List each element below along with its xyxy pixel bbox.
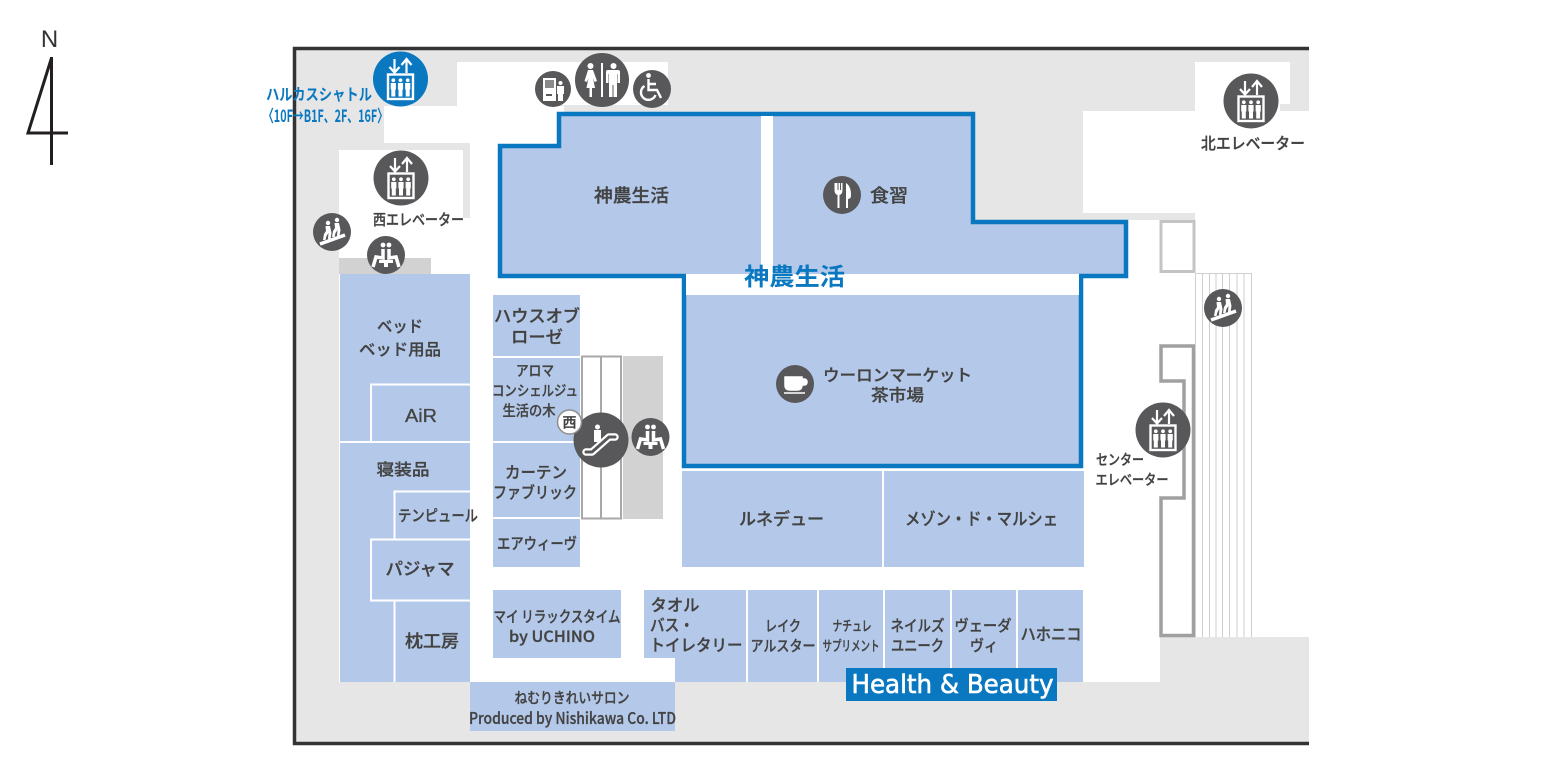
icon: vending machine <box>535 71 571 107</box>
label: 北エレベーター: 北エレベーター <box>1201 130 1305 154</box>
panel: health and beauty shops: タオル <box>650 592 700 616</box>
panel: マイリラックスタイム <box>493 590 621 658</box>
stairs lines <box>1195 273 1252 637</box>
floor plan background <box>294 48 1309 744</box>
panel: lower shops: ルネデュー <box>739 505 824 530</box>
icon: escalator <box>574 412 628 468</box>
panel: left column shops: パジャマ <box>386 555 454 580</box>
panel: middle column shops: カーテン <box>505 459 567 483</box>
panel: middle column shops: 生活の木 <box>502 400 556 421</box>
panel: health and beauty shops: ナチュレ <box>832 616 872 636</box>
panel: health and beauty shops: バス・ <box>650 612 694 636</box>
label: ハルカスシャトル: 〈10F→B1F、2F、16F〉 <box>263 102 388 127</box>
panel: health and beauty shops: ヴェーダ <box>954 614 1012 636</box>
panel: health and beauty shops: ユニーク <box>891 634 944 656</box>
panel: left column shops: ベッド <box>377 313 423 337</box>
panel: ねむりきれいサロン: ねむりきれいサロン <box>514 687 630 708</box>
label: 西エレベーター: 西エレベーター <box>373 208 464 230</box>
label: Health & Beauty: Health & Beauty <box>852 670 1054 700</box>
panel: middle column shops: コンシェルジュ <box>492 380 578 401</box>
icon: Halkas shuttle elevator <box>373 52 428 106</box>
icon: west elevator <box>374 150 428 206</box>
panel: left column shops: ベッド用品 <box>359 336 441 360</box>
label: センターエレベーター: センター <box>1096 449 1144 470</box>
icon: center elevator <box>1136 402 1190 458</box>
panel: left column shops: 寝装品 <box>376 456 430 480</box>
panel: middle column shops: ハウスオブ <box>494 302 580 327</box>
label: センターエレベーター: エレベーター <box>1096 469 1168 490</box>
north void outline <box>1161 222 1194 272</box>
panel: middle column shops: ローゼ <box>511 323 563 348</box>
north arrow: N <box>41 26 58 53</box>
panel: middle column shops: アロマ <box>516 360 554 381</box>
icon: west badge 西 <box>558 410 582 434</box>
center elevator shaft outline <box>1161 346 1194 636</box>
panel: left column shops: テンピュール <box>398 504 478 526</box>
escalator well <box>582 356 663 519</box>
panel: health and beauty shops: アルスター <box>750 635 816 656</box>
panel: health and beauty shops: ハホニコ <box>1020 621 1082 645</box>
panel: マイリラックスタイム: by UCHINO <box>509 625 595 647</box>
panel: left column shops: 枕工房 <box>405 627 459 652</box>
panel: health and beauty shops: ネイルズ <box>890 614 944 636</box>
icon: center stairs <box>1204 289 1242 327</box>
panel: ねむりきれいサロン <box>469 682 676 731</box>
icon: coffee cup <box>776 365 814 403</box>
icon: west bench <box>367 236 405 274</box>
label: ハルカスシャトル: ハルカスシャトル <box>266 81 372 105</box>
panel: middle column shops: エアウィーヴ <box>497 532 577 554</box>
panel: 神農生活 and 食習 highlighted area <box>500 114 1126 466</box>
panel: health and beauty shops: サプリメント <box>822 636 880 656</box>
panel: 神農生活 and 食習 highlighted area: ウーロンマーケット <box>823 362 972 386</box>
panel: middle column shops: ファブリック <box>493 479 577 503</box>
icon: north elevator <box>1224 74 1278 128</box>
panel: health and beauty shops <box>644 590 1083 682</box>
panel: left column shops: AiR <box>405 406 437 426</box>
panel: lower shops <box>682 471 1084 567</box>
icon: fork and knife <box>823 176 861 214</box>
north arrow <box>28 26 68 165</box>
panel: left column shops <box>340 274 478 682</box>
heading: 神農生活 blue: 神農生活 <box>744 257 845 292</box>
panel: ねむりきれいサロン: Produced by Nishikawa Co. LTD <box>469 705 676 729</box>
label: ハルカスシャトル <box>263 81 388 127</box>
icon: restrooms <box>575 53 629 107</box>
panel: health and beauty shops: レイク <box>765 615 801 636</box>
panel: health and beauty shops: トイレタリー <box>650 632 742 656</box>
icon: escalator bench <box>632 418 670 456</box>
icon: west badge 西: 西 <box>562 412 576 432</box>
panel: 神農生活 and 食習 highlighted area: 食習 <box>870 182 908 208</box>
panel: マイリラックスタイム: マイ リラックスタイム <box>494 605 620 627</box>
icon: wheelchair <box>633 70 671 108</box>
panel: middle column shops <box>492 295 580 567</box>
panel: 神農生活 and 食習 highlighted area: 神農生活 <box>594 182 669 208</box>
panel: lower shops: メゾン・ド・マルシェ <box>905 505 1058 530</box>
panel: health and beauty shops: ヴィ <box>970 634 998 656</box>
panel: 神農生活 and 食習 highlighted area: 茶市場 <box>871 382 924 406</box>
label: センターエレベーター <box>1096 449 1168 490</box>
icon: west stairs <box>313 213 351 251</box>
